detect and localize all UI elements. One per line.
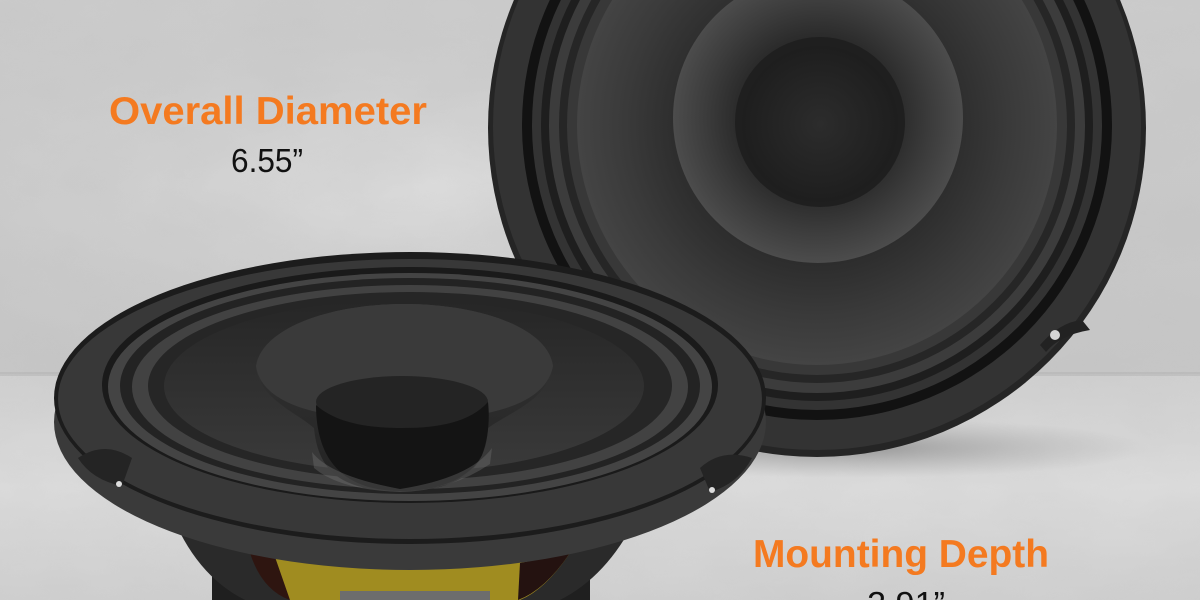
mounting notch	[1040, 320, 1090, 352]
dome	[742, 46, 898, 202]
cone	[164, 300, 644, 472]
heading: Mounting Depth	[753, 533, 1049, 576]
label: overall diameter	[109, 90, 427, 179]
yellow spider	[250, 553, 570, 600]
outer frame	[488, 0, 1146, 457]
value: 6.55”	[231, 142, 303, 179]
mounting notches	[78, 449, 132, 486]
background: concrete floor	[0, 372, 1200, 600]
horn	[673, 0, 963, 263]
label: mounting depth	[753, 533, 1049, 600]
basket	[170, 510, 640, 600]
rim face	[54, 252, 766, 544]
horn outer	[256, 304, 553, 491]
dome base glint	[312, 448, 492, 492]
heading: Overall Diameter	[109, 90, 427, 133]
speaker: rear, front-facing view	[488, 0, 1146, 457]
surround rings	[532, 0, 1102, 410]
surround rings	[102, 267, 718, 503]
terminal block	[340, 591, 490, 600]
rim underside	[54, 274, 766, 570]
magnet	[212, 560, 590, 600]
speaker: front, angled view	[54, 252, 766, 600]
background: concrete wall	[0, 0, 1200, 376]
horn inner throat	[256, 304, 553, 420]
cone	[577, 0, 1057, 365]
dome	[316, 376, 488, 428]
